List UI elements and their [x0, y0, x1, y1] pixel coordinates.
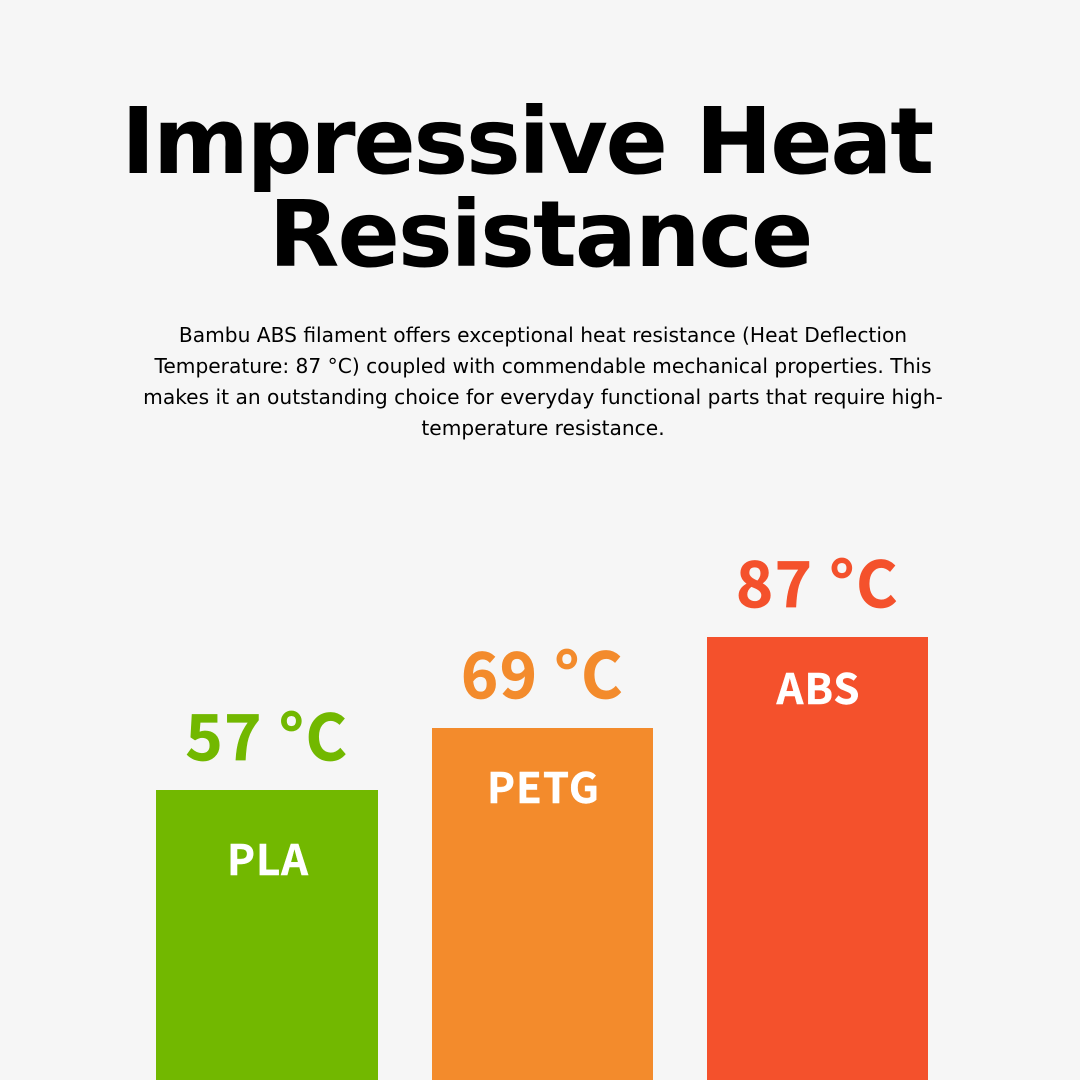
PETG bar [432, 728, 653, 1080]
ABS bar [707, 637, 928, 1080]
title: Resistance [269, 181, 811, 288]
description text: Bambu ABS filament offers exceptional heat resistance (Heat Deflection [179, 323, 907, 347]
description text [143, 323, 943, 440]
PLA value: 57 °C [186, 688, 348, 779]
description text: temperature resistance. [421, 416, 665, 440]
title: Impressive Heat [121, 88, 932, 195]
description text: makes it an outstanding choice for everyday functional parts that require high- [143, 385, 943, 409]
PETG column [432, 626, 653, 1080]
bar chart [156, 535, 928, 1080]
PLA label: PLA [227, 827, 309, 888]
title [121, 88, 932, 288]
ABS label: ABS [777, 656, 860, 717]
PETG value: 69 °C [461, 626, 624, 717]
ABS value: 87 °C [736, 535, 899, 626]
description text: Temperature: 87 °C) coupled with commendable mechanical properties. This [154, 354, 932, 378]
PETG label: PETG [487, 755, 600, 816]
ABS column [707, 535, 928, 1080]
PLA column [156, 688, 378, 1080]
PLA bar [156, 790, 378, 1080]
